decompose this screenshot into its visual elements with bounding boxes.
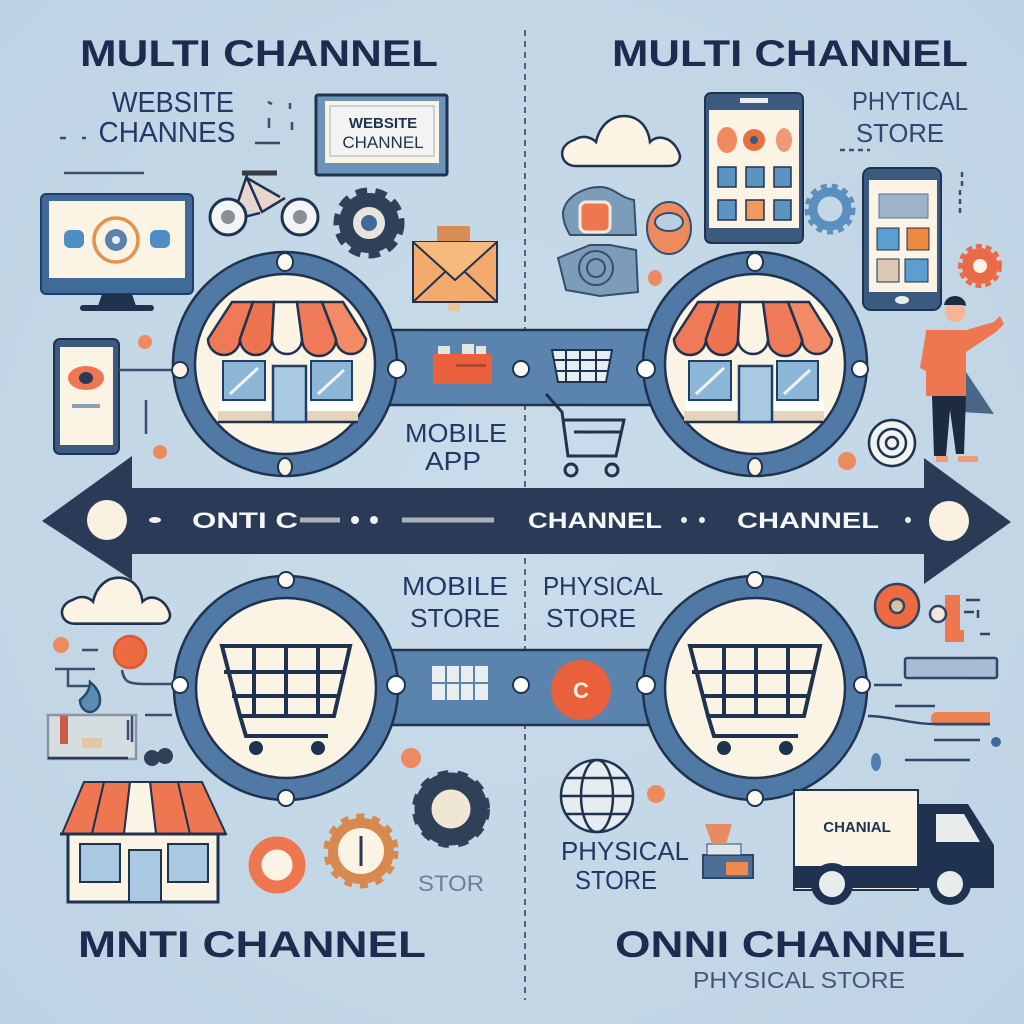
label: physical store middle: PHYSICAL bbox=[543, 571, 663, 601]
label: mobile app: MOBILE bbox=[405, 418, 507, 448]
central double arrow: CHANNEL bbox=[528, 508, 662, 533]
icon: gear blue bbox=[807, 186, 853, 232]
connector band: top bbox=[340, 330, 700, 405]
icon: desktop monitor bbox=[41, 194, 193, 311]
icon: cloud lower bbox=[62, 578, 170, 624]
icon: box bbox=[703, 824, 753, 878]
left lower diagram cluster bbox=[48, 636, 173, 766]
icon: store lower left bbox=[60, 782, 226, 902]
right lower diagram cluster bbox=[868, 584, 1001, 771]
subtitle: physical store: PHYSICAL STORE bbox=[693, 967, 905, 993]
label: mobile store: STORE bbox=[410, 603, 500, 633]
icon: phone right bbox=[863, 168, 941, 310]
icon: delivery truck bbox=[794, 790, 994, 901]
connector band: bottom bbox=[340, 650, 700, 725]
icon: website monitor: WEBSITE bbox=[349, 115, 417, 132]
icon: orange gear lower bbox=[326, 816, 396, 886]
label: physical store lower bbox=[561, 836, 689, 895]
icon: envelope bbox=[413, 226, 497, 311]
title: bottom right: ONNI CHANNEL bbox=[615, 924, 965, 965]
hub: top right store bbox=[637, 252, 868, 476]
icon: orange bowl bbox=[647, 202, 691, 254]
connector details bbox=[432, 344, 612, 720]
label: mobile app bbox=[405, 418, 507, 476]
label: mobile store bbox=[402, 571, 508, 633]
icon: phone left bbox=[54, 339, 119, 454]
title: top left: MULTI CHANNEL bbox=[80, 33, 438, 74]
label: stor: STOR bbox=[418, 871, 484, 896]
hub: top left store bbox=[172, 252, 406, 476]
label: physical store lower: PHYSICAL bbox=[561, 836, 689, 866]
label: mobile app: APP bbox=[425, 446, 481, 476]
hub: bottom right cart bbox=[637, 572, 870, 806]
central double arrow: CHANNEL bbox=[737, 508, 879, 533]
icon: website monitor bbox=[316, 95, 447, 175]
icon: tablet bbox=[705, 93, 803, 243]
hub: bottom left cart bbox=[172, 572, 405, 806]
label: physical store lower: STORE bbox=[575, 865, 657, 895]
icon: gear orange bbox=[960, 246, 1000, 286]
central double arrow bbox=[42, 456, 1011, 584]
label: website channels: CHANNES bbox=[98, 117, 236, 149]
icon: gear dark lower bbox=[416, 774, 486, 844]
icon: orange ring bbox=[255, 843, 299, 887]
label: website channels: WEBSITE bbox=[112, 87, 234, 119]
icon: person bbox=[920, 296, 1004, 462]
small dots bbox=[53, 270, 856, 803]
icon: website monitor: CHANNEL bbox=[342, 133, 424, 152]
label: physical store middle bbox=[543, 571, 663, 633]
title: bottom left: MNTI CHANNEL bbox=[78, 924, 426, 965]
icon: camera bbox=[558, 187, 638, 296]
icon: spiral bbox=[869, 420, 915, 466]
label: physical store middle: STORE bbox=[546, 603, 636, 633]
connector details: C bbox=[573, 678, 589, 703]
label: website channels bbox=[98, 87, 236, 149]
label: physical store top bbox=[852, 86, 968, 148]
title: top right: MULTI CHANNEL bbox=[612, 33, 968, 74]
icon: delivery truck: CHANIAL bbox=[823, 819, 891, 836]
icon: gear dark bbox=[338, 192, 400, 254]
icon: cloud top bbox=[562, 116, 680, 166]
central double arrow: ONTI C bbox=[192, 508, 298, 533]
icon: globe bbox=[561, 760, 633, 832]
cables and small doodads bbox=[60, 102, 962, 434]
label: physical store top: STORE bbox=[856, 118, 944, 148]
icon: bicycle bbox=[210, 173, 318, 235]
label: mobile store: MOBILE bbox=[402, 571, 508, 601]
small cart below band bbox=[546, 394, 624, 476]
label: physical store top: PHYTICAL bbox=[852, 86, 968, 116]
